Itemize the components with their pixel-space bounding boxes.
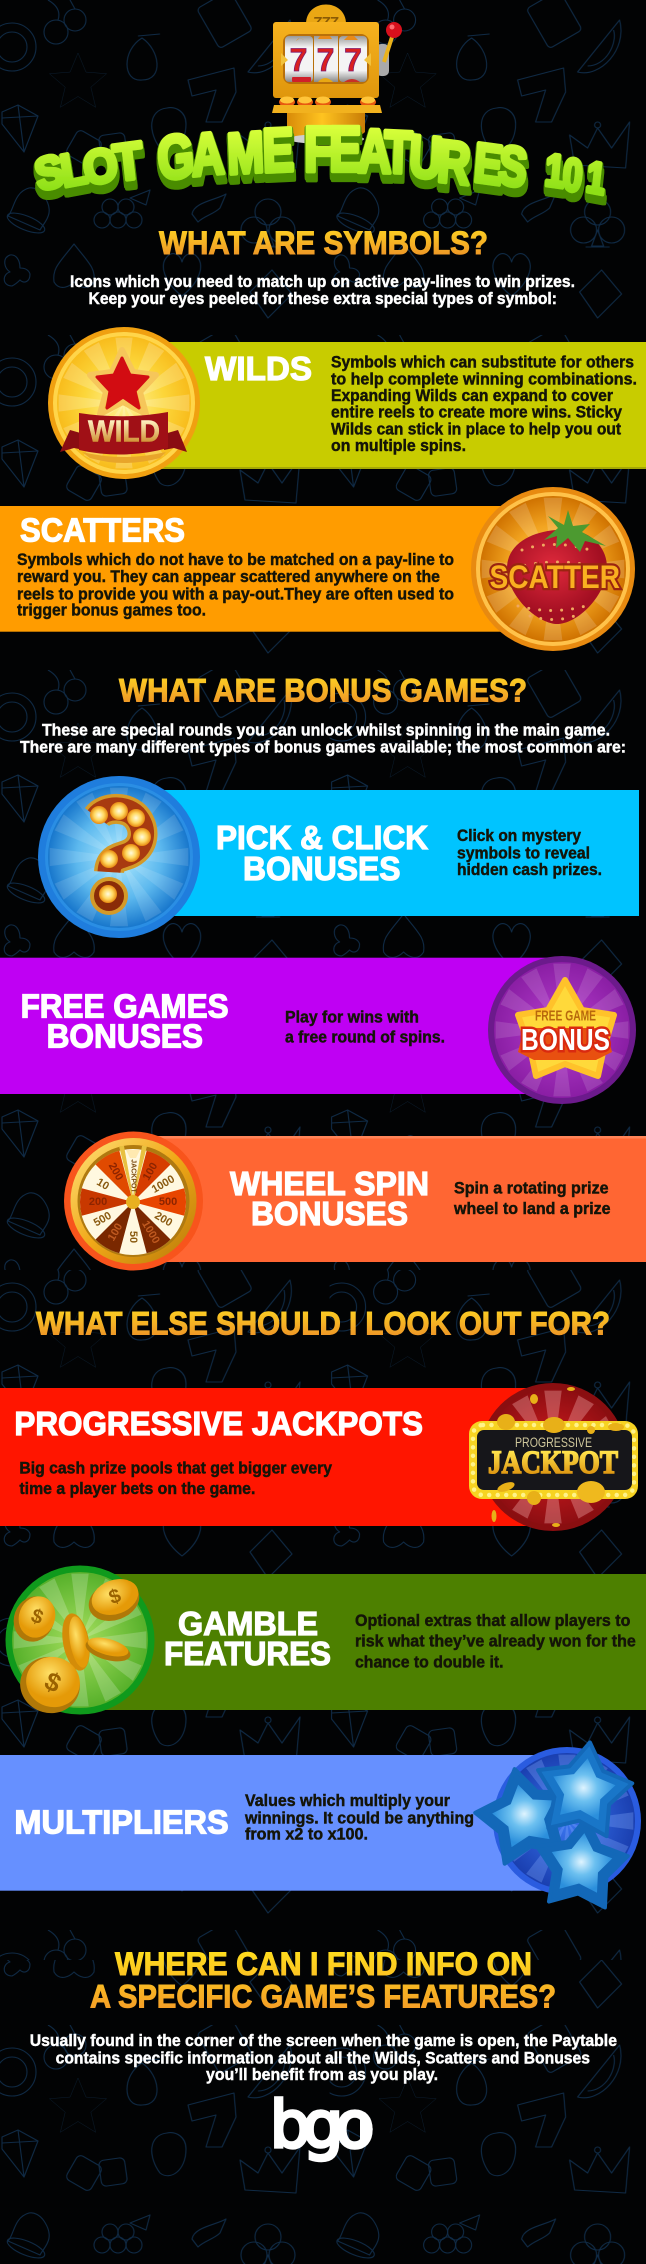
text: gamble description: chance to double it. <box>355 1654 504 1672</box>
text: wilds description: Symbols which can substitute for others <box>331 353 634 371</box>
text: wheel spin description: wheel to land a prize <box>453 1200 611 1218</box>
heading: what are symbols: WHAT ARE SYMBOLS? <box>159 225 488 261</box>
text: wheel spin description: Spin a rotating prize <box>454 1179 609 1197</box>
text: pick and click description <box>457 827 602 879</box>
heading: what are bonus games: WHAT ARE BONUS GAMES? <box>119 673 527 709</box>
icon: slot machine: 7 <box>317 42 334 78</box>
title: T <box>383 119 413 187</box>
title: T <box>111 131 146 192</box>
icon: prize wheel: 1000 <box>150 1173 177 1196</box>
intro: bonus games: These are special rounds you can unlock whilst spinning in the main game. <box>42 722 610 740</box>
panel: gamble features <box>6 1566 646 1720</box>
logo: bgo: bgo <box>270 2089 371 2163</box>
text: scatters description: Symbols which do not have to be matched on a pay-line to <box>17 551 454 569</box>
title: R <box>435 128 473 198</box>
icon: prize wheel <box>64 1132 203 1270</box>
text: paytable info: contains specific information about all the Wilds, Scatters and Bonuses <box>56 2049 590 2067</box>
title: E <box>329 115 362 186</box>
icon: prize wheel: 200 <box>106 1161 125 1183</box>
text: paytable info: Usually found in the corner of the screen when the game is open, the Paytable <box>30 2032 617 2050</box>
text: gamble description <box>355 1612 636 1672</box>
title: A <box>357 116 392 186</box>
title: 1 <box>543 144 567 198</box>
icon: free game bonus badge <box>488 956 636 1104</box>
heading: wilds: WILDS <box>205 350 312 387</box>
heading: wheel spin <box>230 1165 429 1232</box>
icon: prize wheel: 10 <box>94 1176 111 1193</box>
intro: bonus games <box>20 722 626 756</box>
panel: pick and click bonuses <box>38 776 639 938</box>
title: O <box>80 137 121 195</box>
heading: where can i find info <box>90 1946 556 2015</box>
text: wilds description: entire reels to create more wins. Sticky <box>331 403 623 421</box>
icon: gold coins badge: $ <box>28 1605 46 1629</box>
title <box>31 114 608 204</box>
intro: symbols: Icons which you need to match up on active pay-lines to win prizes. <box>70 273 575 291</box>
icon: gold coins badge: $ <box>40 1665 66 1699</box>
icon: wild badge: WILD <box>88 414 160 449</box>
panel: progressive jackpots <box>0 1383 638 1531</box>
text: pick and click description: symbols to reveal <box>457 844 590 862</box>
text: scatters description: reward you. They can appear scattered anywhere on the <box>17 568 440 586</box>
text: progressive jackpots description: Big cash prize pools that get bigger every <box>19 1459 333 1477</box>
text: free games description: Play for wins with <box>285 1008 419 1026</box>
icon: prize wheel: 1000 <box>139 1219 162 1246</box>
icon: prize wheel: 500 <box>92 1210 114 1229</box>
text: multipliers description: from x2 to x100. <box>245 1825 368 1843</box>
title: S <box>31 145 68 201</box>
text: paytable info: you’ll benefit from as you play. <box>206 2066 438 2084</box>
title: U <box>407 123 444 192</box>
heading: where can i find info: A SPECIFIC GAME’S FEATURES? <box>90 1979 556 2015</box>
heading: what else should i look out for: WHAT ELSE SHOULD I LOOK OUT FOR? <box>36 1305 610 1341</box>
text: scatters description: reels to provide you with a pay-out.They are often used to <box>17 585 454 603</box>
heading: where can i find info: WHERE CAN I FIND INFO ON <box>115 1946 532 1982</box>
intro: symbols <box>70 273 575 308</box>
heading: free games: BONUSES <box>47 1018 203 1055</box>
heading: pick and click <box>216 819 428 887</box>
icon: slot machine: 777 <box>313 14 339 31</box>
text: wilds description: Wilds can stick in place to help you out <box>331 420 621 438</box>
icon: progressive jackpot sign: JACKPOT <box>488 1445 618 1481</box>
text: scatters description: trigger bonus games too. <box>17 601 206 619</box>
text: gamble description: Optional extras that allow players to <box>355 1612 630 1630</box>
heading: pick and click: PICK & CLICK <box>216 819 428 856</box>
heading: multipliers: MULTIPLIERS <box>14 1803 229 1840</box>
heading: gamble features: GAMBLE <box>178 1605 318 1642</box>
text: multipliers description: Values which multiply your <box>245 1792 451 1810</box>
heading: gamble features: FEATURES <box>164 1635 331 1672</box>
heading: progressive jackpots: PROGRESSIVE JACKPOTS <box>14 1405 423 1442</box>
icon: wild badge <box>48 327 200 479</box>
title: M <box>226 119 265 186</box>
text: gamble description: risk what they’ve already won for the <box>355 1633 636 1651</box>
icon: prize wheel: 100 <box>106 1221 125 1243</box>
text: paytable info <box>30 2032 617 2084</box>
heading: gamble features <box>164 1605 331 1672</box>
icon: gold coins badge <box>6 1566 154 1720</box>
icon: gold coins badge: $ <box>106 1585 124 1609</box>
panel: wilds <box>48 327 646 479</box>
icon: progressive jackpot sign: PROGRESSIVE <box>515 1435 592 1450</box>
heading: wheel spin: BONUSES <box>251 1195 408 1232</box>
text: wilds description: on multiple spins. <box>331 437 466 455</box>
panel: multipliers <box>0 1736 641 1909</box>
text: progressive jackpots description: time a player bets on the game. <box>19 1480 255 1498</box>
text: pick and click description: Click on mystery <box>457 827 582 845</box>
icon: free game bonus badge: FREE GAME <box>535 1008 596 1025</box>
icon: slot machine <box>272 4 402 144</box>
icon: slot machine: 7 <box>290 42 307 78</box>
panel: free games bonuses <box>0 956 636 1104</box>
text: wheel spin description <box>453 1179 611 1218</box>
icon: progressive jackpot sign <box>469 1383 638 1531</box>
icon: prize wheel: 100 <box>141 1161 160 1183</box>
icon: free game bonus badge: BONUS <box>521 1022 610 1057</box>
icon: prize wheel: JACKPOT <box>130 1159 136 1193</box>
text: pick and click description: hidden cash prizes. <box>457 861 602 879</box>
heading: scatters: SCATTERS <box>20 512 185 549</box>
intro: bonus games: There are many different types of bonus games available; the most common are: <box>20 738 626 756</box>
text: free games description <box>285 1008 445 1047</box>
text: wilds description: to help complete winning combinations. <box>331 370 637 388</box>
icon: prize wheel: 500 <box>159 1196 177 1208</box>
text: wilds description: Expanding Wilds can expand to cover <box>331 387 614 405</box>
icon: question mark badge <box>38 776 200 938</box>
title: 1 <box>584 153 608 204</box>
title: S <box>496 133 530 200</box>
lever <box>376 22 402 76</box>
text: progressive jackpots description <box>19 1459 333 1498</box>
icon: prize wheel: 200 <box>152 1210 174 1229</box>
text: wilds description <box>331 353 637 455</box>
heading: pick and click: BONUSES <box>243 850 400 887</box>
title: E <box>261 114 295 186</box>
text: multipliers description <box>244 1792 474 1843</box>
icon: prize wheel: 200 <box>89 1196 107 1208</box>
icon: scatter badge <box>471 487 635 651</box>
panel: scatters <box>0 487 635 651</box>
heading: wheel spin: WHEEL SPIN <box>230 1165 429 1202</box>
title: 0 <box>561 148 585 202</box>
title: F <box>304 115 334 186</box>
heading: free games: FREE GAMES <box>21 987 229 1024</box>
icon: prize wheel: 50 <box>127 1231 139 1243</box>
icon: scatter badge: SCATTER <box>490 559 620 595</box>
icon: slot machine: 7 <box>344 42 362 78</box>
icon: blue stars badge <box>468 1736 641 1909</box>
text: multipliers description: winnings. It could be anything <box>244 1809 474 1827</box>
title: A <box>189 120 226 189</box>
text: free games description: a free round of spins. <box>285 1029 445 1047</box>
panel: wheel spin bonuses <box>64 1132 646 1270</box>
heading: free games <box>21 987 229 1055</box>
title: L <box>57 142 91 197</box>
intro: symbols: Keep your eyes peeled for these extra special types of symbol: <box>88 290 557 308</box>
text: scatters description <box>17 551 454 619</box>
title: E <box>472 131 505 197</box>
title: G <box>155 120 196 193</box>
